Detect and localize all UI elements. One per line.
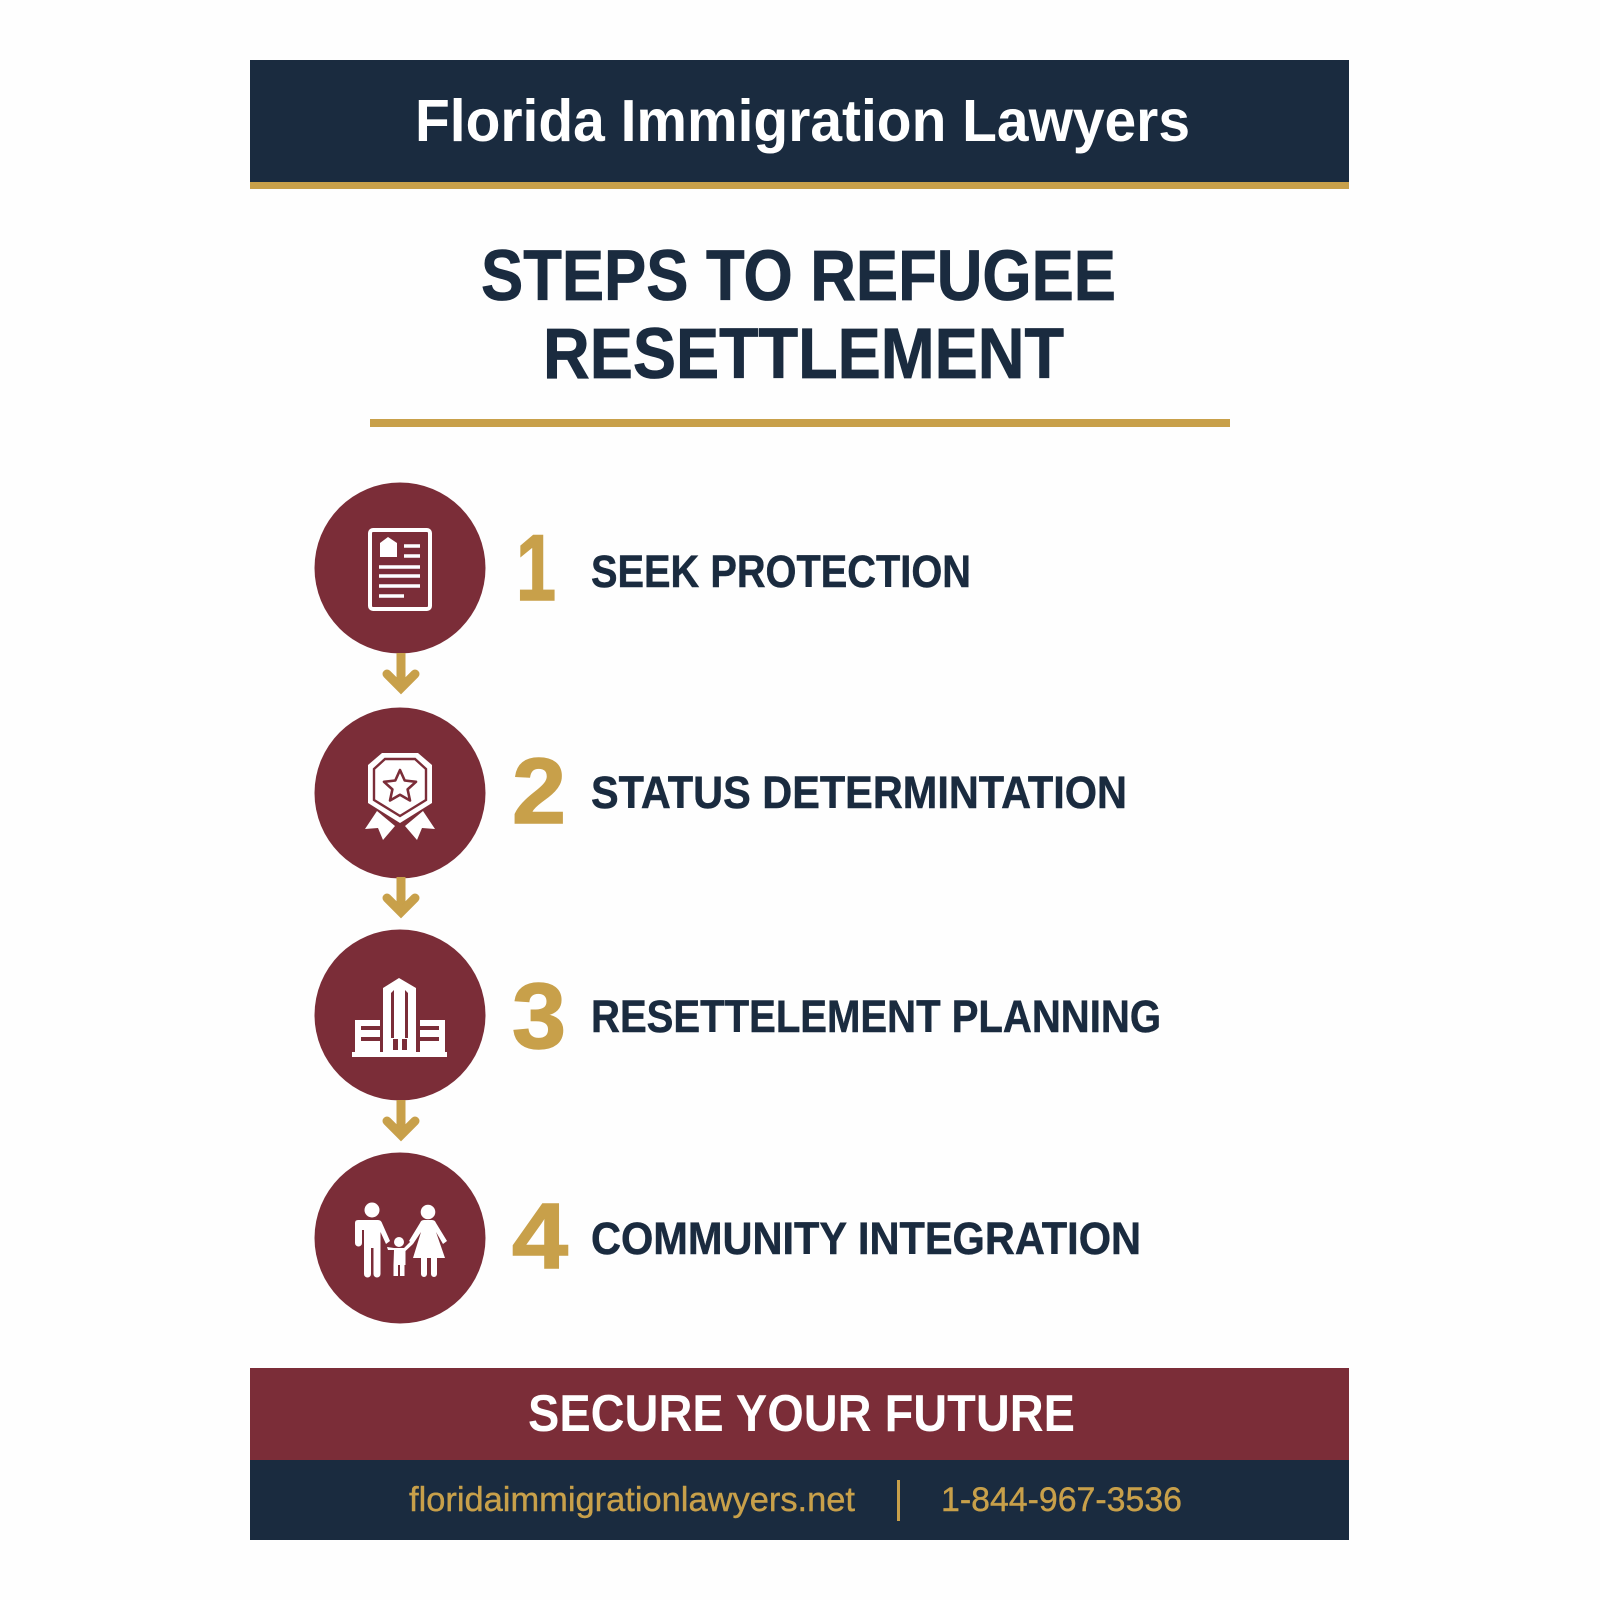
step 3 number: 3 (512, 964, 566, 1068)
header firm name: Florida Immigration Lawyers (415, 88, 1190, 154)
step 3 circle (314, 930, 486, 1100)
main title: RESETTLEMENT (543, 315, 1064, 394)
arrow 3 to 4 (387, 1100, 415, 1135)
main title: STEPS TO REFUGEE (481, 237, 1116, 316)
icon: badge (365, 753, 435, 840)
call to action band (250, 1368, 1349, 1460)
step 1 label: SEEK PROTECTION (591, 546, 971, 597)
step 2 (314, 708, 1127, 878)
step 4 number: 4 (512, 1184, 568, 1288)
step 1 circle (314, 482, 486, 654)
phone: 1-844-967-3536 (941, 1481, 1182, 1519)
step 2 label: STATUS DETERMINTATION (591, 767, 1127, 818)
header banner (250, 60, 1349, 189)
icon: document (370, 530, 430, 609)
contact band (250, 1460, 1349, 1540)
arrow 1 to 2 (387, 653, 415, 688)
step 4 (314, 1152, 1141, 1324)
step 2 number: 2 (512, 739, 566, 843)
icon: building (352, 978, 447, 1057)
separator (897, 1480, 900, 1521)
arrow 2 to 3 (387, 877, 415, 912)
main title (481, 237, 1116, 394)
call to action text: SECURE YOUR FUTURE (528, 1385, 1075, 1443)
website: floridaimmigrationlawyers.net (409, 1481, 856, 1519)
icon: family (355, 1202, 447, 1278)
step 1 number: 1 (516, 515, 556, 620)
step 1 (314, 482, 971, 654)
title rule (370, 419, 1230, 427)
step 4 circle (314, 1152, 486, 1324)
step 4 label: COMMUNITY INTEGRATION (591, 1213, 1141, 1264)
step 3 label: RESETTELEMENT PLANNING (591, 991, 1161, 1042)
step 3 (314, 930, 1161, 1100)
step 2 circle (314, 708, 486, 878)
